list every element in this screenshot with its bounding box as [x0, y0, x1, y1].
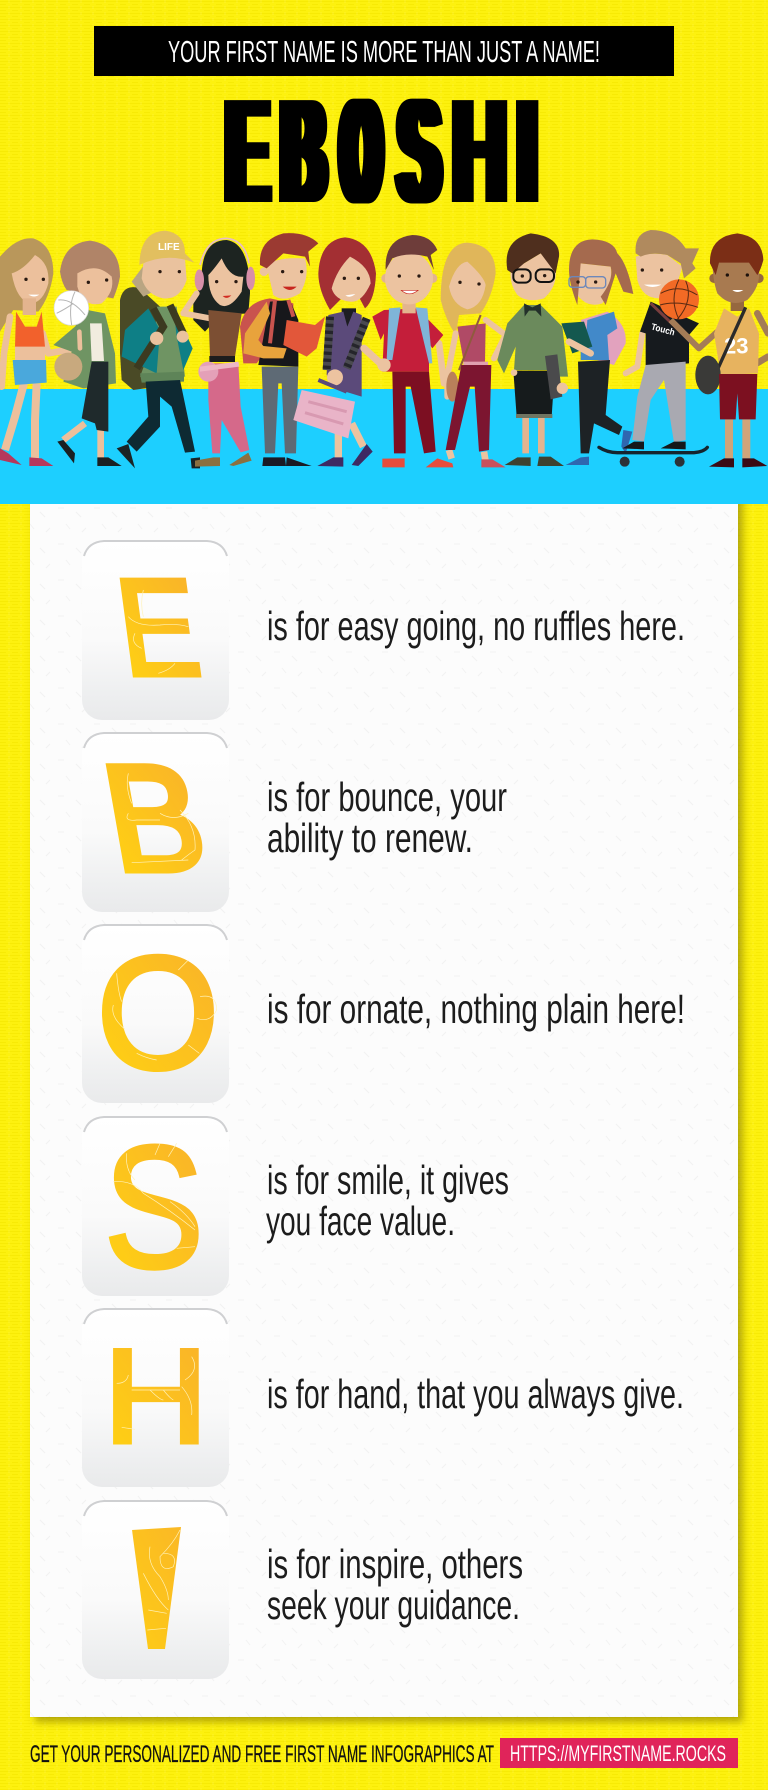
- person: boy with glasses and green jumper: [497, 233, 568, 466]
- person: girl with headphones and pink trousers: [183, 238, 255, 467]
- letter row: H: [82, 1309, 684, 1487]
- title: EBOSHI: H: [452, 68, 507, 233]
- person: red-haired girl with pink bag: [293, 237, 376, 467]
- tagline banner: [94, 26, 674, 76]
- title: EBOSHI: O: [342, 69, 380, 234]
- people left half: [0, 231, 376, 468]
- text: S lines: [266, 1157, 509, 1244]
- text: B lines: is for bounce, your: [267, 774, 507, 820]
- letter row: E: [82, 541, 685, 720]
- text: S lines: is for smile, it gives: [267, 1157, 509, 1203]
- card: H: [82, 1309, 229, 1487]
- title: EBOSHI: I: [506, 69, 549, 234]
- person: boy in red shirt with blue backpack: [364, 235, 453, 467]
- text: B lines: [267, 774, 507, 861]
- letter: B: B: [92, 735, 217, 903]
- title: EBOSHI: [227, 68, 549, 235]
- letter row: S: [82, 1110, 509, 1305]
- letter: E: E: [108, 551, 208, 705]
- blue floor band: [0, 389, 768, 504]
- person: boy in yellow tank top with shoulder bag: [695, 233, 768, 467]
- person: girl in green jacket with volleyball: [53, 241, 122, 466]
- illustration: group of twelve young people: [0, 230, 768, 468]
- letter: H: H: [104, 1323, 208, 1471]
- text: B lines: ability to renew.: [267, 815, 473, 861]
- person: boy on skateboard with basketball: [599, 230, 717, 467]
- text: I lines: is for inspire, others: [267, 1541, 523, 1587]
- people right half: [364, 230, 768, 467]
- title: EBOSHI: S: [399, 69, 439, 233]
- title: EBOSHI: E: [227, 69, 268, 235]
- card: E: [82, 541, 229, 720]
- panel: white letter panel: [30, 490, 738, 1717]
- card: B: [82, 733, 229, 912]
- person: boy on skateboard with basketball: Touch: [650, 322, 676, 338]
- text: I lines: seek your guidance.: [267, 1582, 520, 1628]
- title: EBOSHI: B: [282, 68, 325, 233]
- letter row: I: [82, 1500, 522, 1679]
- person: girl in orange top: [0, 238, 77, 466]
- person: blonde girl in pink top: [441, 243, 506, 467]
- letter: I: [132, 1527, 181, 1649]
- letter: O: O: [97, 924, 219, 1102]
- person: boy with yellow cap and backpack: [117, 231, 200, 468]
- person: boy in yellow tank top with shoulder bag: 23: [724, 333, 748, 358]
- person: girl with tablet and pink backpack: [561, 239, 633, 465]
- person: boy with yellow cap and backpack: LIFE: [158, 242, 180, 253]
- letter: S: S: [104, 1110, 204, 1305]
- letter row: O: [82, 924, 685, 1103]
- card: O: [82, 925, 229, 1103]
- card: S: [82, 1117, 229, 1296]
- letter row: B: [82, 733, 507, 912]
- person: boy reading a red book: [240, 233, 325, 466]
- text: I lines: [267, 1541, 523, 1628]
- text: S lines: you face value.: [266, 1198, 455, 1244]
- letter: I: I: [109, 1487, 205, 1688]
- card: I: [82, 1501, 229, 1679]
